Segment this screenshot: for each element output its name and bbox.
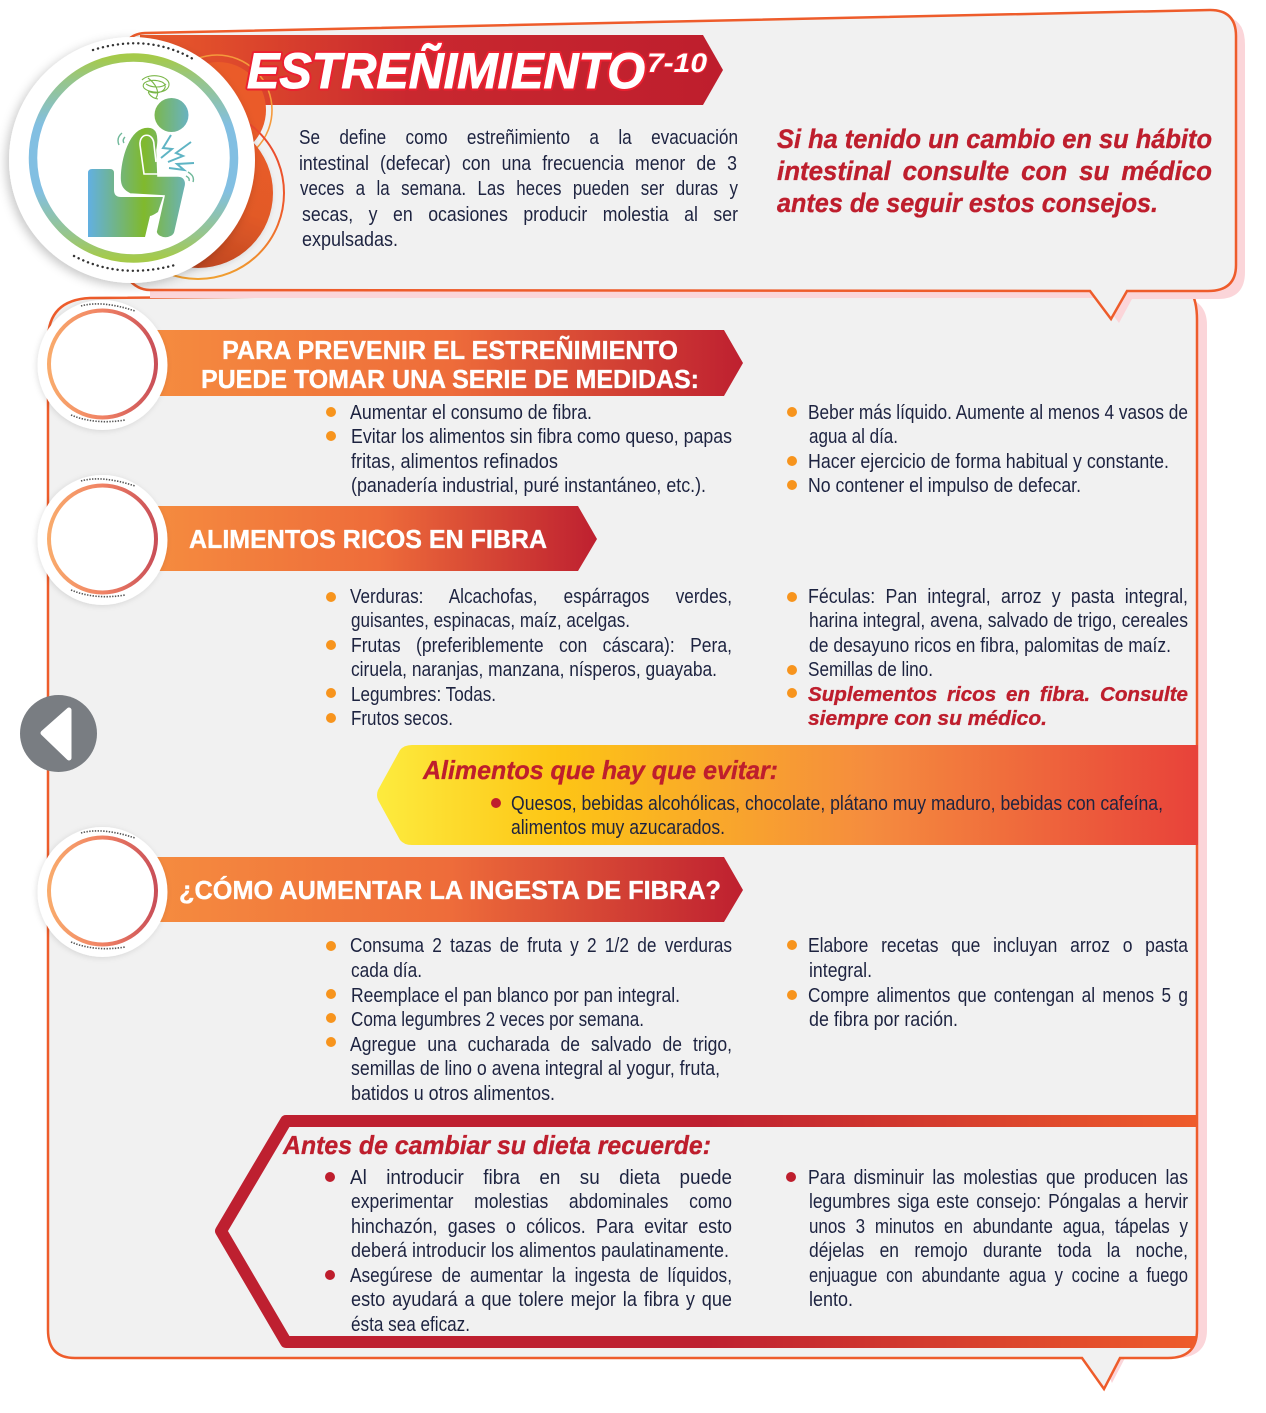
title: ESTREÑIMIENTO [247,43,645,99]
text: definition: secas, y en ocasiones producir molestia al ser [302,204,738,226]
list: diet advice left: hinchazón, gases o cólicos. Para evitar esto [351,1216,732,1238]
list: increase fibre right: Compre alimentos que contengan al menos 5 g [808,985,1188,1007]
list: prevention right: agua al día. [809,426,898,448]
list: fibre foods right: harina integral, avena, salvado de trigo, cereales [809,610,1188,632]
banner: how to increase fibre [150,857,743,922]
list: diet advice right: unos 3 minutos en abundante agua, tápelas y [809,1216,1188,1238]
callout: see your doctor: Si ha tenido un cambio en su hábito [777,124,1212,154]
text: definition: expulsadas. [302,229,398,251]
icon: section badge 3 [38,827,168,957]
heading: foods to avoid: Alimentos que hay que evitar: [422,755,778,785]
list: prevention left: (panadería industrial, puré instantáneo, etc.). [351,475,706,497]
list: diet advice left: deberá introducir los alimentos paulatinamente. [351,1240,729,1262]
list: increase fibre left: batidos u otros alimentos. [351,1083,555,1105]
list: diet advice left: ésta sea eficaz. [351,1314,470,1336]
list: foods to avoid: Quesos, bebidas alcohólicas, chocolate, plátano muy maduro, bebidas con cafeína, [511,793,1163,815]
panel: definition [112,10,1245,323]
list: fibre foods right: Féculas: Pan integral, arroz y pasta integral, [808,586,1188,608]
list: fibre foods right: de desayuno ricos en fibra, palomitas de maíz. [809,635,1171,657]
list: increase fibre left: Reemplace el pan blanco por pan integral. [351,985,680,1007]
list: prevention left [326,402,732,497]
list: increase fibre left: cada día. [351,960,422,982]
list: increase fibre left: Agregue una cucharada de salvado de trigo, [350,1034,732,1056]
list: prevention left: Evitar los alimentos sin fibra como queso, papas [351,426,732,448]
list: increase fibre left [326,935,732,1105]
text: definition: Se define como estreñimiento a la evacuación [299,127,738,149]
list: increase fibre right: Elabore recetas que incluyan arroz o pasta [808,935,1189,957]
banner: fibre-rich foods [150,506,597,571]
list: prevention right [787,402,1188,497]
callout: see your doctor: antes de seguir estos consejos. [777,188,1158,218]
list: increase fibre left: semillas de lino o avena integral al yogur, fruta, [351,1058,720,1080]
title outline: ESTREÑIMIENTO [247,43,645,99]
list: increase fibre left: Coma legumbres 2 veces por semana. [351,1009,644,1031]
list: fibre foods left: Legumbres: Todas. [351,684,496,706]
panel: recommendations [38,290,1207,1389]
callout: see your doctor: intestinal consulte con su médico [777,156,1212,186]
list: increase fibre right: de fibra por ración. [809,1009,958,1031]
text: definition: intestinal (defecar) con una frecuencia menor de 3 [299,153,737,175]
text: definition: veces a la semana. Las heces pueden ser duras y [300,178,738,200]
list: increase fibre right [787,935,1189,1031]
frame: before changing your diet [221,1121,1199,1342]
banner: prevention: PARA PREVENIR EL ESTREÑIMIENTO [222,335,678,365]
list: diet advice right: lento. [809,1289,853,1311]
list: diet advice right: legumbres siga este consejo: Póngalas a hervir [809,1191,1188,1213]
list: diet advice left [325,1167,732,1336]
list: fibre foods left [326,586,732,730]
list: diet advice right: Para disminuir las molestias que producen las [808,1167,1188,1189]
list: prevention right: No contener el impulso de defecar. [808,475,1081,497]
list: diet advice right: déjelas en remojo durante toda la noche, [809,1240,1188,1262]
list: fibre foods right: siempre con su médico. [808,708,1047,730]
list: fibre foods left: Verduras: Alcachofas, espárragos verdes, [350,586,732,608]
list: prevention left: Aumentar el consumo de fibra. [350,402,592,424]
list: diet advice left: Asegúrese de aumentar la ingesta de líquidos, [350,1265,732,1287]
icon: section badge 2 [38,475,168,605]
title ribbon [140,35,723,105]
list: fibre foods left: ciruela, naranjas, manzana, nísperos, guayaba. [351,659,717,681]
list: prevention right: Beber más líquido. Aumente al menos 4 vasos de [808,402,1188,424]
list: foods to avoid: alimentos muy azucarados. [511,817,725,839]
list: prevention right: Hacer ejercicio de forma habitual y constante. [808,451,1169,473]
icon: person with constipation [9,37,255,283]
list: fibre foods left: Frutos secos. [351,708,453,730]
list: diet advice right: enjuague con abundante agua y cocine a fuego [809,1265,1188,1287]
icon: section badge 1 [38,300,168,430]
list: diet advice left: Al introducir fibra en su dieta puede [350,1167,732,1189]
list: fibre foods right: Semillas de lino. [808,659,933,681]
list: fibre foods left: Frutas (preferiblemente con cáscara): Pera, [351,635,732,657]
banner: prevention [150,330,743,396]
list: diet advice left: esto ayudará a que tolere mejor la fibra y que [351,1289,732,1311]
banner: foods to avoid [377,745,1198,845]
list: fibre foods right: Suplementos ricos en fibra. Consulte [808,684,1188,706]
banner: fibre-rich foods: ALIMENTOS RICOS EN FIBRA [189,524,547,554]
list: diet advice left: experimentar molestias abdominales como [351,1191,732,1213]
heading: before changing your diet: Antes de cambiar su dieta recuerde: [282,1130,711,1160]
list: fibre foods left: guisantes, espinacas, maíz, acelgas. [351,610,630,632]
list: increase fibre left: Consuma 2 tazas de fruta y 2 1/2 de verduras [350,935,732,957]
list: fibre foods right [787,586,1188,730]
callout: see your doctor [777,124,1212,218]
list: increase fibre right: integral. [809,960,872,982]
list: diet advice right [786,1167,1188,1311]
title superscript: 7-10 [647,48,707,78]
icon: back arrow button [20,695,97,772]
text: definition [299,127,738,251]
banner: prevention: PUEDE TOMAR UNA SERIE DE MEDIDAS: [201,364,699,394]
banner: how to increase fibre: ¿CÓMO AUMENTAR LA INGESTA DE FIBRA? [179,875,721,905]
list: prevention left: fritas, alimentos refinados [351,451,558,473]
list: foods to avoid [491,793,1163,839]
decorative orange circles [112,55,284,279]
